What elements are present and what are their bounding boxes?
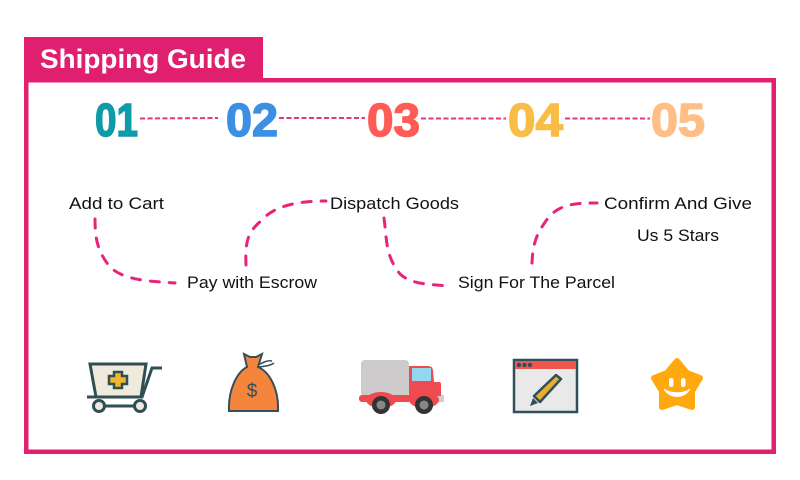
icon: money bag: $	[247, 381, 258, 402]
curved arrow: sign to confirm	[532, 203, 597, 263]
title: Shipping Guide	[40, 44, 246, 74]
label: dispatch goods: Dispatch Goods	[330, 194, 459, 213]
icon: smiling star	[654, 361, 700, 407]
label: us 5 stars: Us 5 Stars	[637, 226, 719, 245]
title tab	[24, 37, 263, 80]
number 05: 05	[651, 94, 705, 146]
panel: guide frame	[26, 80, 774, 452]
number 01: 01	[95, 94, 138, 146]
step numbers	[95, 94, 705, 146]
icon: shopping cart	[87, 364, 162, 412]
number 02: 02	[226, 94, 278, 146]
number 03: 03	[367, 94, 420, 146]
icon: delivery truck	[359, 360, 444, 414]
curved arrow: escrow to dispatch	[246, 201, 326, 265]
number 04: 04	[508, 94, 563, 146]
label: sign for the parcel: Sign For The Parcel	[458, 273, 615, 292]
curved arrow: dispatch to sign	[384, 218, 448, 286]
label: confirm and give: Confirm And Give	[604, 194, 752, 213]
dashed connectors between numbers	[140, 117, 650, 120]
label: pay with escrow: Pay with Escrow	[187, 273, 318, 292]
curved arrow: cart to escrow	[95, 219, 175, 283]
step labels	[69, 194, 752, 292]
icon: money bag	[229, 354, 278, 411]
label: add to cart: Add to Cart	[69, 194, 164, 213]
icon: browser with pencil	[514, 360, 577, 412]
